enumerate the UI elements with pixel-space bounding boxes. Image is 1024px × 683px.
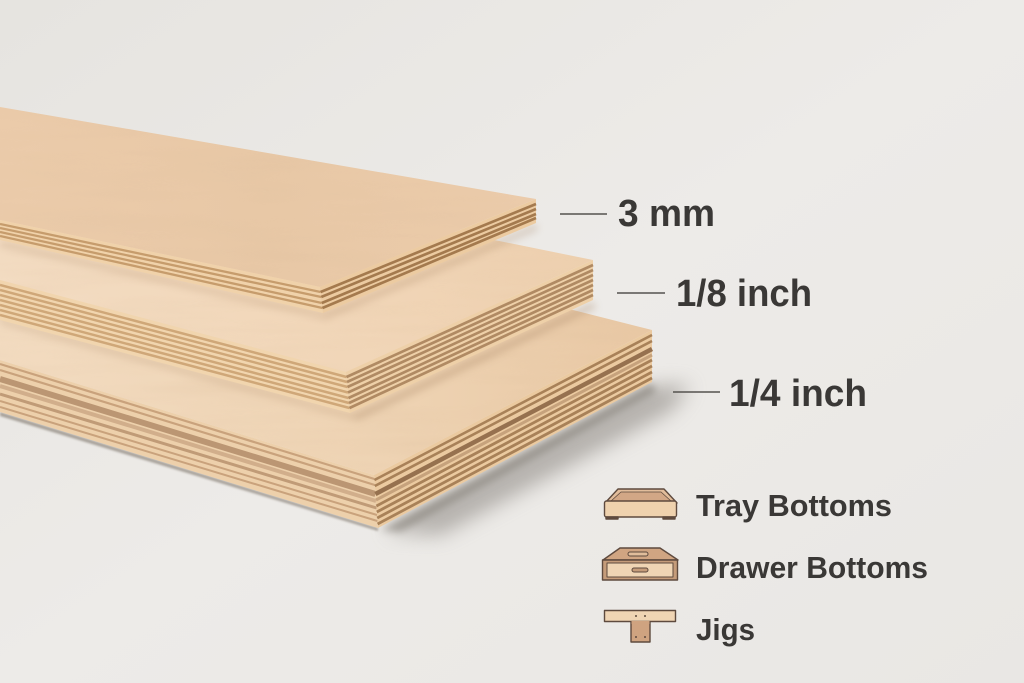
icon: drawer [602, 548, 678, 580]
board top face [0, 210, 652, 475]
board side edge [320, 199, 536, 313]
board grain [0, 210, 652, 475]
board front edge [0, 280, 350, 413]
board front edge [0, 360, 378, 528]
board top face [0, 107, 536, 287]
board side edge [374, 330, 652, 528]
shadow of middle board [0, 302, 596, 420]
board grain [0, 107, 536, 287]
label: 1/4 inch: 1/4 inch [729, 373, 867, 415]
plywood board: 1/4 inch [0, 210, 652, 528]
board top face [0, 140, 593, 372]
label: 1/8 inch: 1/8 inch [676, 273, 812, 315]
text: Drawer Bottoms: Drawer Bottoms [696, 550, 928, 585]
cast shadow under boards [0, 383, 690, 535]
plywood board: 3 mm [0, 107, 536, 313]
text: Tray Bottoms: Tray Bottoms [696, 488, 892, 523]
board side edge [346, 260, 593, 413]
label: 3 mm: 3 mm [618, 193, 715, 235]
board front edge [0, 220, 323, 313]
board grain [0, 140, 593, 372]
text: Jigs: Jigs [696, 612, 755, 647]
icon: tray [604, 489, 677, 519]
icon: jig [604, 610, 676, 642]
plywood board: 1/8 inch [0, 140, 593, 413]
shadow of top board [0, 224, 538, 319]
